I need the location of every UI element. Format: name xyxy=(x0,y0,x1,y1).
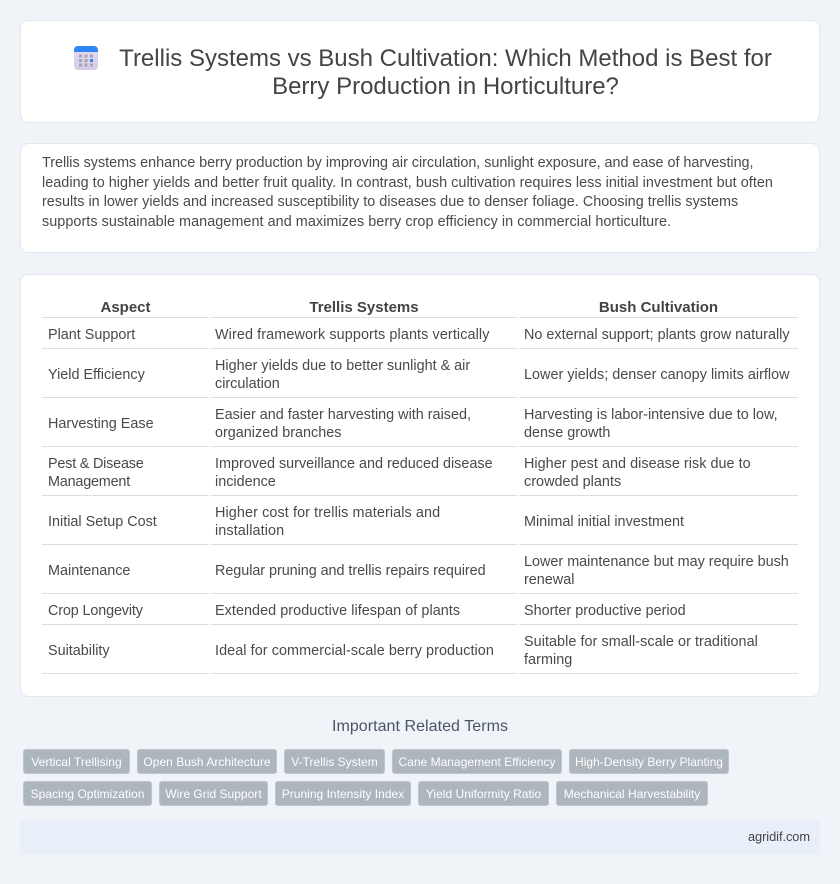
row: harvesting ease: dense growth xyxy=(524,425,610,441)
title: Trellis Systems vs Bush Cultivation: Which Method is Best for xyxy=(119,45,772,72)
table header: Bush Cultivation xyxy=(599,299,718,316)
row: pest and disease management: incidence xyxy=(215,474,276,490)
row: initial setup cost: Higher cost for trellis materials and xyxy=(215,505,440,521)
tags: related terms: Wire Grid Support xyxy=(165,787,262,801)
footer xyxy=(20,820,820,854)
row: suitability: farming xyxy=(524,652,572,668)
row: harvesting ease: Easier and faster harvesting with raised, xyxy=(215,407,471,423)
row: plant support xyxy=(42,327,798,349)
row: yield efficiency xyxy=(42,358,798,398)
table header: Trellis Systems xyxy=(309,299,419,316)
text block: introduction: leading to higher yields and better fruit quality. In contrast, bush cultivation requires less initial investment but often xyxy=(42,175,773,191)
row: maintenance xyxy=(42,554,798,594)
row: initial setup cost: Minimal initial investment xyxy=(524,514,684,530)
row: plant support: Wired framework supports plants vertically xyxy=(215,327,490,343)
row: pest and disease management: Pest & Disease xyxy=(48,456,144,472)
row: pest and disease management: Improved surveillance and reduced disease xyxy=(215,456,493,472)
row: harvesting ease: Harvesting is labor-intensive due to low, xyxy=(524,407,778,423)
table header: Aspect xyxy=(100,299,151,316)
row: pest and disease management: crowded plants xyxy=(524,474,621,490)
row: initial setup cost: Initial Setup Cost xyxy=(48,514,157,530)
title xyxy=(119,45,772,100)
row: suitability: Suitable for small-scale or traditional xyxy=(524,634,758,650)
tags: related terms: Spacing Optimization xyxy=(31,787,144,801)
tags: related terms: Open Bush Architecture xyxy=(143,755,271,769)
tags: related terms: Cane Management Efficiency xyxy=(398,755,556,769)
text block: introduction: results in lower yields and increased susceptibility to diseases due to denser foliage. Choosing trellis systems xyxy=(42,194,738,210)
row: crop longevity: Crop Longevity xyxy=(48,603,143,619)
row: suitability: Ideal for commercial-scale berry production xyxy=(215,643,494,659)
tags: related terms: Vertical Trellising xyxy=(31,755,122,769)
row: suitability xyxy=(42,634,798,674)
row: suitability: Suitability xyxy=(48,643,110,659)
tags: related terms xyxy=(23,749,729,806)
row: crop longevity: Shorter productive period xyxy=(524,603,686,619)
table: comparison xyxy=(42,299,798,674)
tags: related terms: V-Trellis System xyxy=(291,755,378,769)
panel: comparison table xyxy=(20,274,820,697)
heading: related terms: Important Related Terms xyxy=(332,718,508,735)
text block: introduction: Trellis systems enhance berry production by improving air circulation, sunlight exposure, and ease of harvesting, xyxy=(42,155,754,171)
row: plant support: Plant Support xyxy=(48,327,135,343)
row: harvesting ease: Harvesting Ease xyxy=(48,416,154,432)
row: pest and disease management xyxy=(42,456,798,496)
row: pest and disease management: Higher pest and disease risk due to xyxy=(524,456,751,472)
tags: related terms: Pruning Intensity Index xyxy=(282,787,404,801)
row: maintenance: renewal xyxy=(524,572,574,588)
row: crop longevity xyxy=(42,603,798,625)
tags: related terms: Mechanical Harvestability xyxy=(564,787,700,801)
row: maintenance: Lower maintenance but may require bush xyxy=(524,554,789,570)
row: initial setup cost: installation xyxy=(215,523,284,539)
row: yield efficiency: Higher yields due to better sunlight & air xyxy=(215,358,470,374)
row: yield efficiency: Lower yields; denser canopy limits airflow xyxy=(524,367,790,383)
row: pest and disease management: Management xyxy=(48,474,130,490)
row: harvesting ease xyxy=(42,407,798,447)
row: initial setup cost xyxy=(42,505,798,545)
row: yield efficiency: Yield Efficiency xyxy=(48,367,145,383)
row: yield efficiency: circulation xyxy=(215,376,280,392)
row: crop longevity: Extended productive lifespan of plants xyxy=(215,603,460,619)
icon: calendar xyxy=(74,46,98,70)
table header xyxy=(42,299,798,318)
tags: related terms: Yield Uniformity Ratio xyxy=(426,787,541,801)
text block: introduction xyxy=(42,155,773,230)
tags: related terms: High-Density Berry Planting xyxy=(575,755,723,769)
footer source: agridif.com xyxy=(748,829,810,844)
row: harvesting ease: organized branches xyxy=(215,425,341,441)
panel: introduction xyxy=(20,143,820,253)
panel: title header xyxy=(20,20,820,123)
title: Berry Production in Horticulture? xyxy=(272,73,619,100)
row: maintenance: Maintenance xyxy=(48,563,130,579)
text block: introduction: supports sustainable management and maximizes berry crop efficiency in commercial horticulture. xyxy=(42,214,671,230)
row: plant support: No external support; plants grow naturally xyxy=(524,327,790,343)
row: maintenance: Regular pruning and trellis repairs required xyxy=(215,563,486,579)
